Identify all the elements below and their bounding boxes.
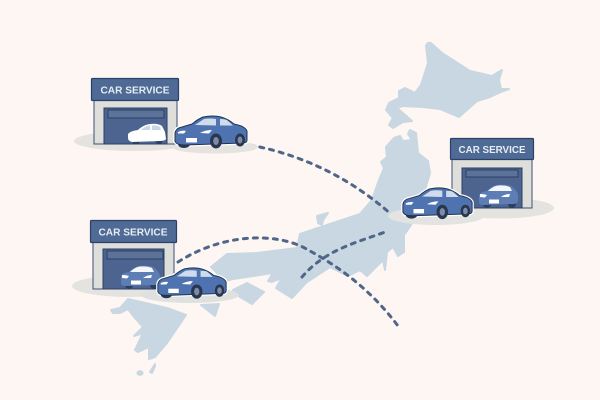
door band: [108, 110, 164, 118]
door band: [107, 251, 163, 259]
map: Awaji strip: [201, 304, 219, 316]
garage door: [103, 249, 164, 289]
car shadow: east: [388, 207, 484, 225]
route: dotted line from west car to east car: [250, 145, 392, 215]
route: dotted line from Kansai to east car: [302, 231, 388, 277]
map of Japan: [111, 43, 509, 375]
garage door: [104, 108, 167, 144]
car: southwest: [158, 268, 226, 299]
sign text: CAR SERVICE: [98, 226, 168, 238]
service station: northwest: [74, 78, 194, 151]
sign: [450, 138, 534, 160]
map: Hokkaido: [386, 43, 509, 128]
sign text: CAR SERVICE: [458, 144, 526, 156]
building wall: [452, 158, 532, 208]
building wall: [93, 241, 174, 289]
ground shadow: [74, 131, 194, 151]
car shadow: southwest: [141, 287, 239, 303]
garage door: [462, 168, 522, 208]
map: Sado island: [317, 213, 328, 225]
route: dotted arc to southern point: [178, 238, 398, 326]
car: east: [403, 188, 472, 219]
map: southern islands: [138, 364, 155, 375]
car: northwest: [175, 116, 247, 148]
ground shadow: [446, 198, 554, 218]
door band: [466, 170, 518, 177]
car in garage: [479, 185, 518, 208]
service station: east: [446, 138, 554, 218]
service station: southwest: [72, 220, 190, 297]
building wall: [94, 100, 177, 144]
sign: [92, 78, 178, 100]
ground shadow: [72, 275, 190, 297]
map: Kyushu: [111, 299, 186, 359]
map: Honshu: [211, 130, 430, 298]
white car in garage: [128, 124, 166, 144]
car in garage: [121, 266, 160, 289]
map: Shikoku: [233, 283, 264, 304]
sign text: CAR SERVICE: [100, 84, 170, 96]
sign: [90, 220, 176, 242]
car shadow: northwest: [172, 140, 258, 154]
